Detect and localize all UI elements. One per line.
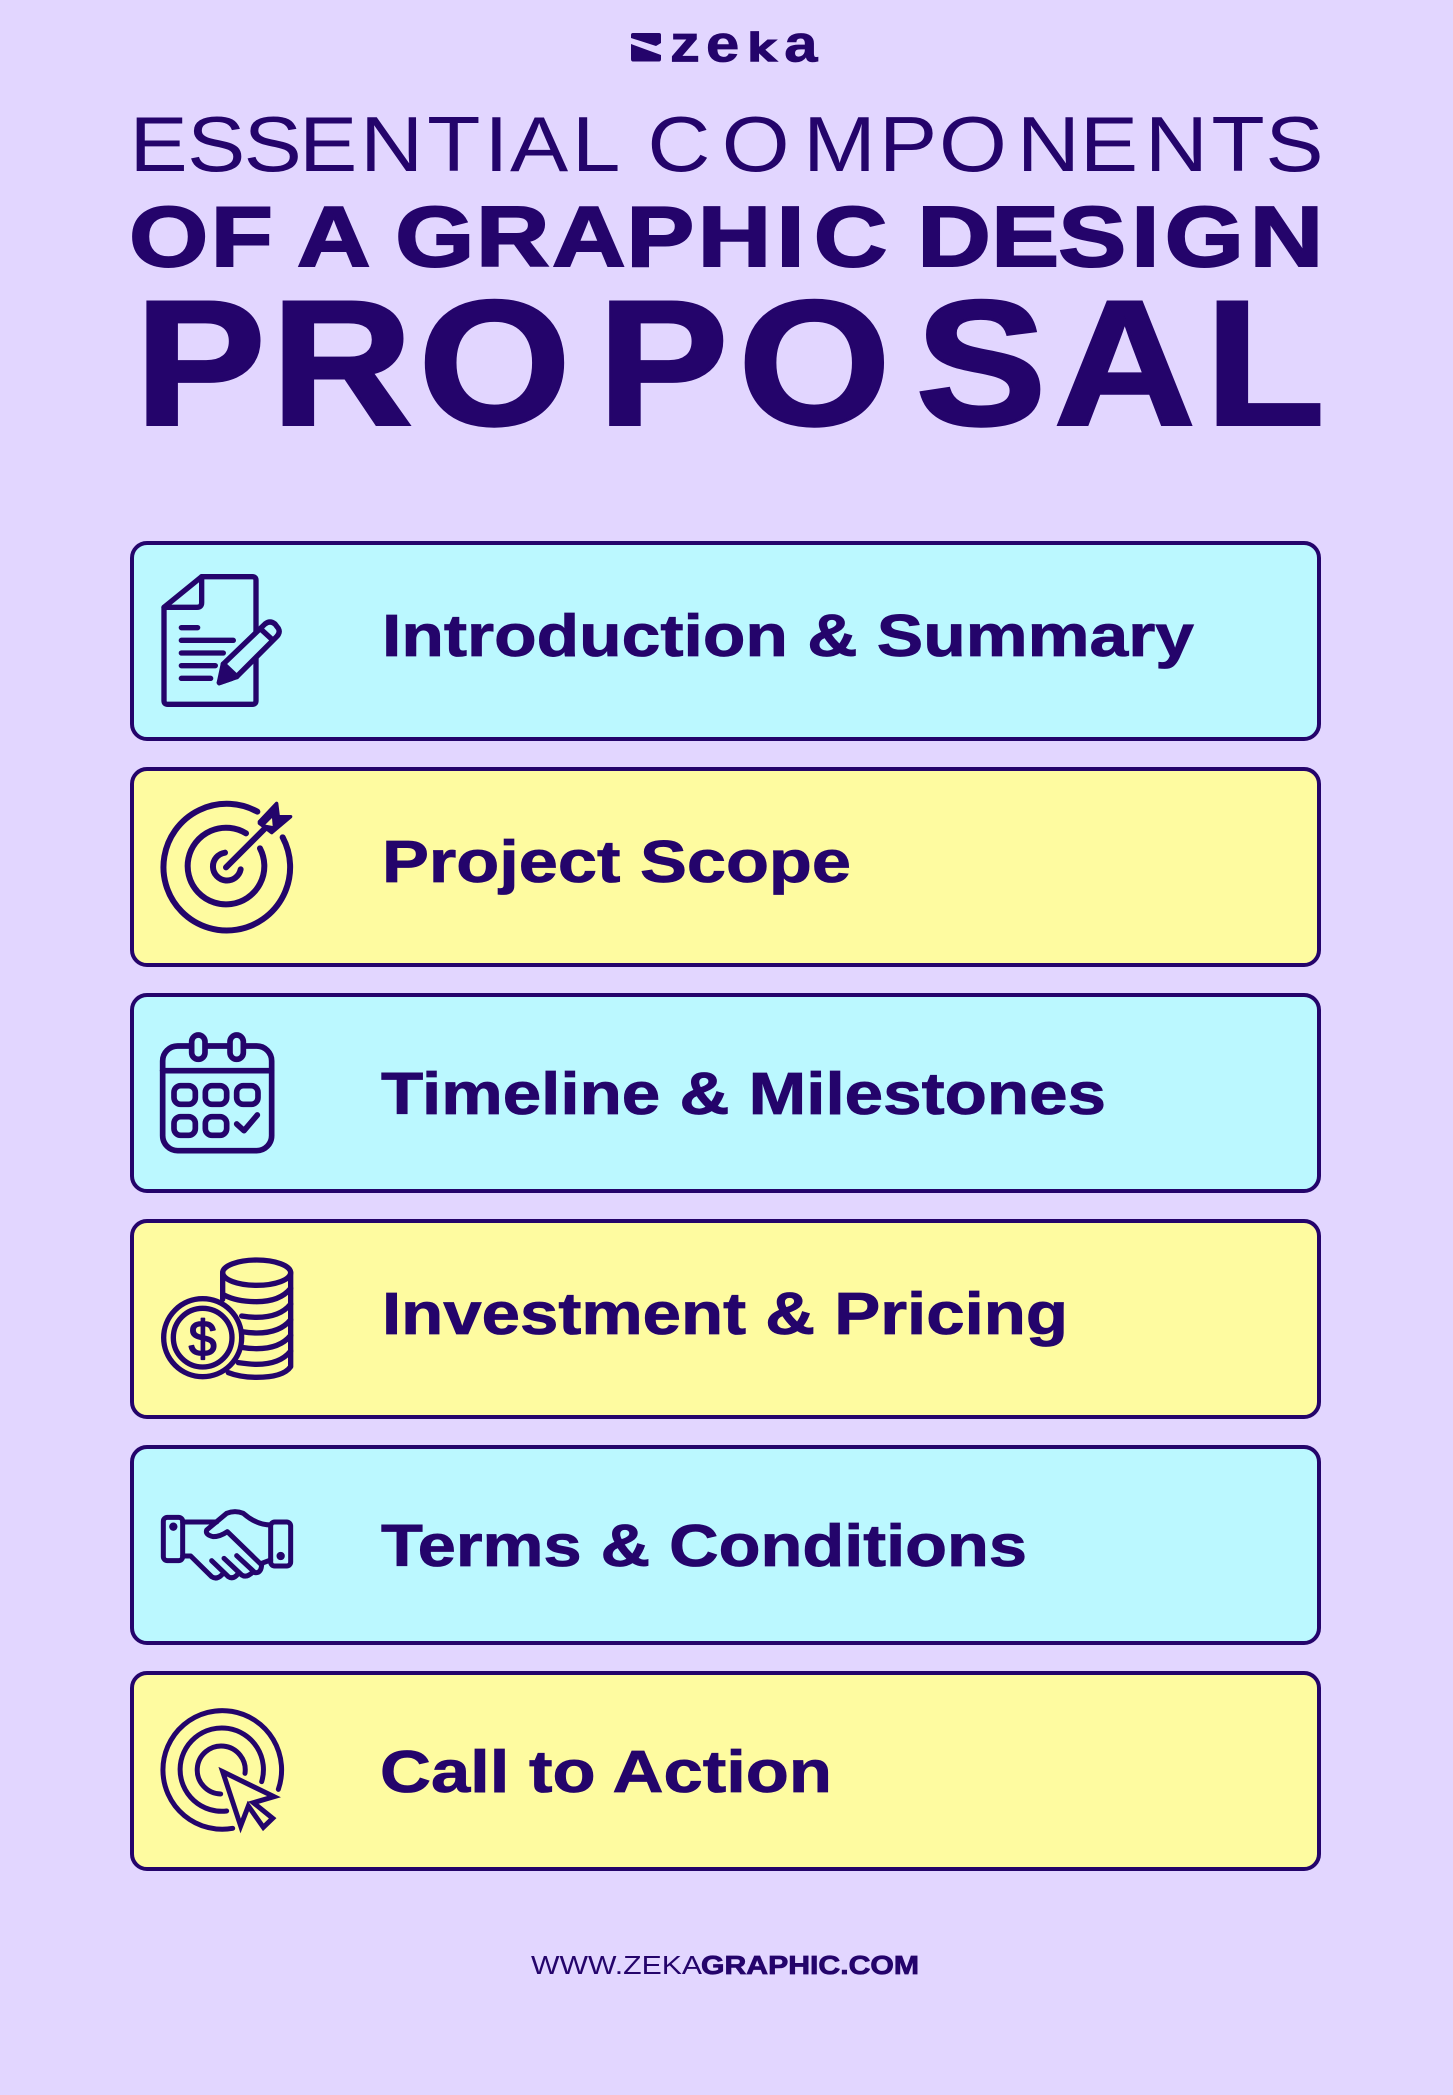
footer url — [531, 1950, 919, 1980]
label: Introduction & Summary — [382, 603, 1194, 669]
icon: calendar — [163, 1035, 272, 1151]
panel: Call to Action — [132, 1673, 1319, 1869]
panel: Investment & Pricing — [132, 1221, 1319, 1417]
icon: coins and dollar — [164, 1260, 291, 1377]
dollar sign: $ — [189, 1311, 217, 1367]
label: Terms & Conditions — [381, 1513, 1027, 1579]
logo wordmark: ze — [670, 14, 739, 73]
label: Timeline & Milestones — [381, 1061, 1106, 1127]
label: Call to Action — [380, 1739, 832, 1805]
label: Investment & Pricing — [382, 1281, 1068, 1347]
footer url: WWW.ZEKA — [531, 1950, 703, 1980]
title line 3: PROPOSAL — [135, 264, 1325, 463]
title line 1: ESSENTIAL COMPONENTS — [130, 102, 1324, 188]
title line 2: OF A GRAPHIC DESIGN — [129, 189, 1323, 284]
icon: target with cursor — [163, 1711, 282, 1829]
icon: document and pencil — [164, 577, 279, 704]
icon: zeka logo mark — [631, 33, 661, 62]
label: Project Scope — [382, 829, 851, 895]
panel: Introduction & Summary — [132, 543, 1319, 739]
icon: target with arrow — [163, 803, 291, 930]
logo: zeka — [631, 14, 818, 73]
panel: Project Scope — [132, 769, 1319, 965]
title — [129, 102, 1325, 463]
footer url: GRAPHIC.COM — [701, 1950, 919, 1980]
icon: handshake — [163, 1512, 291, 1578]
panel: Terms & Conditions — [132, 1447, 1319, 1643]
logo wordmark: a — [784, 14, 818, 73]
panel: Timeline & Milestones — [132, 995, 1319, 1191]
logo wordmark: k — [747, 25, 778, 71]
